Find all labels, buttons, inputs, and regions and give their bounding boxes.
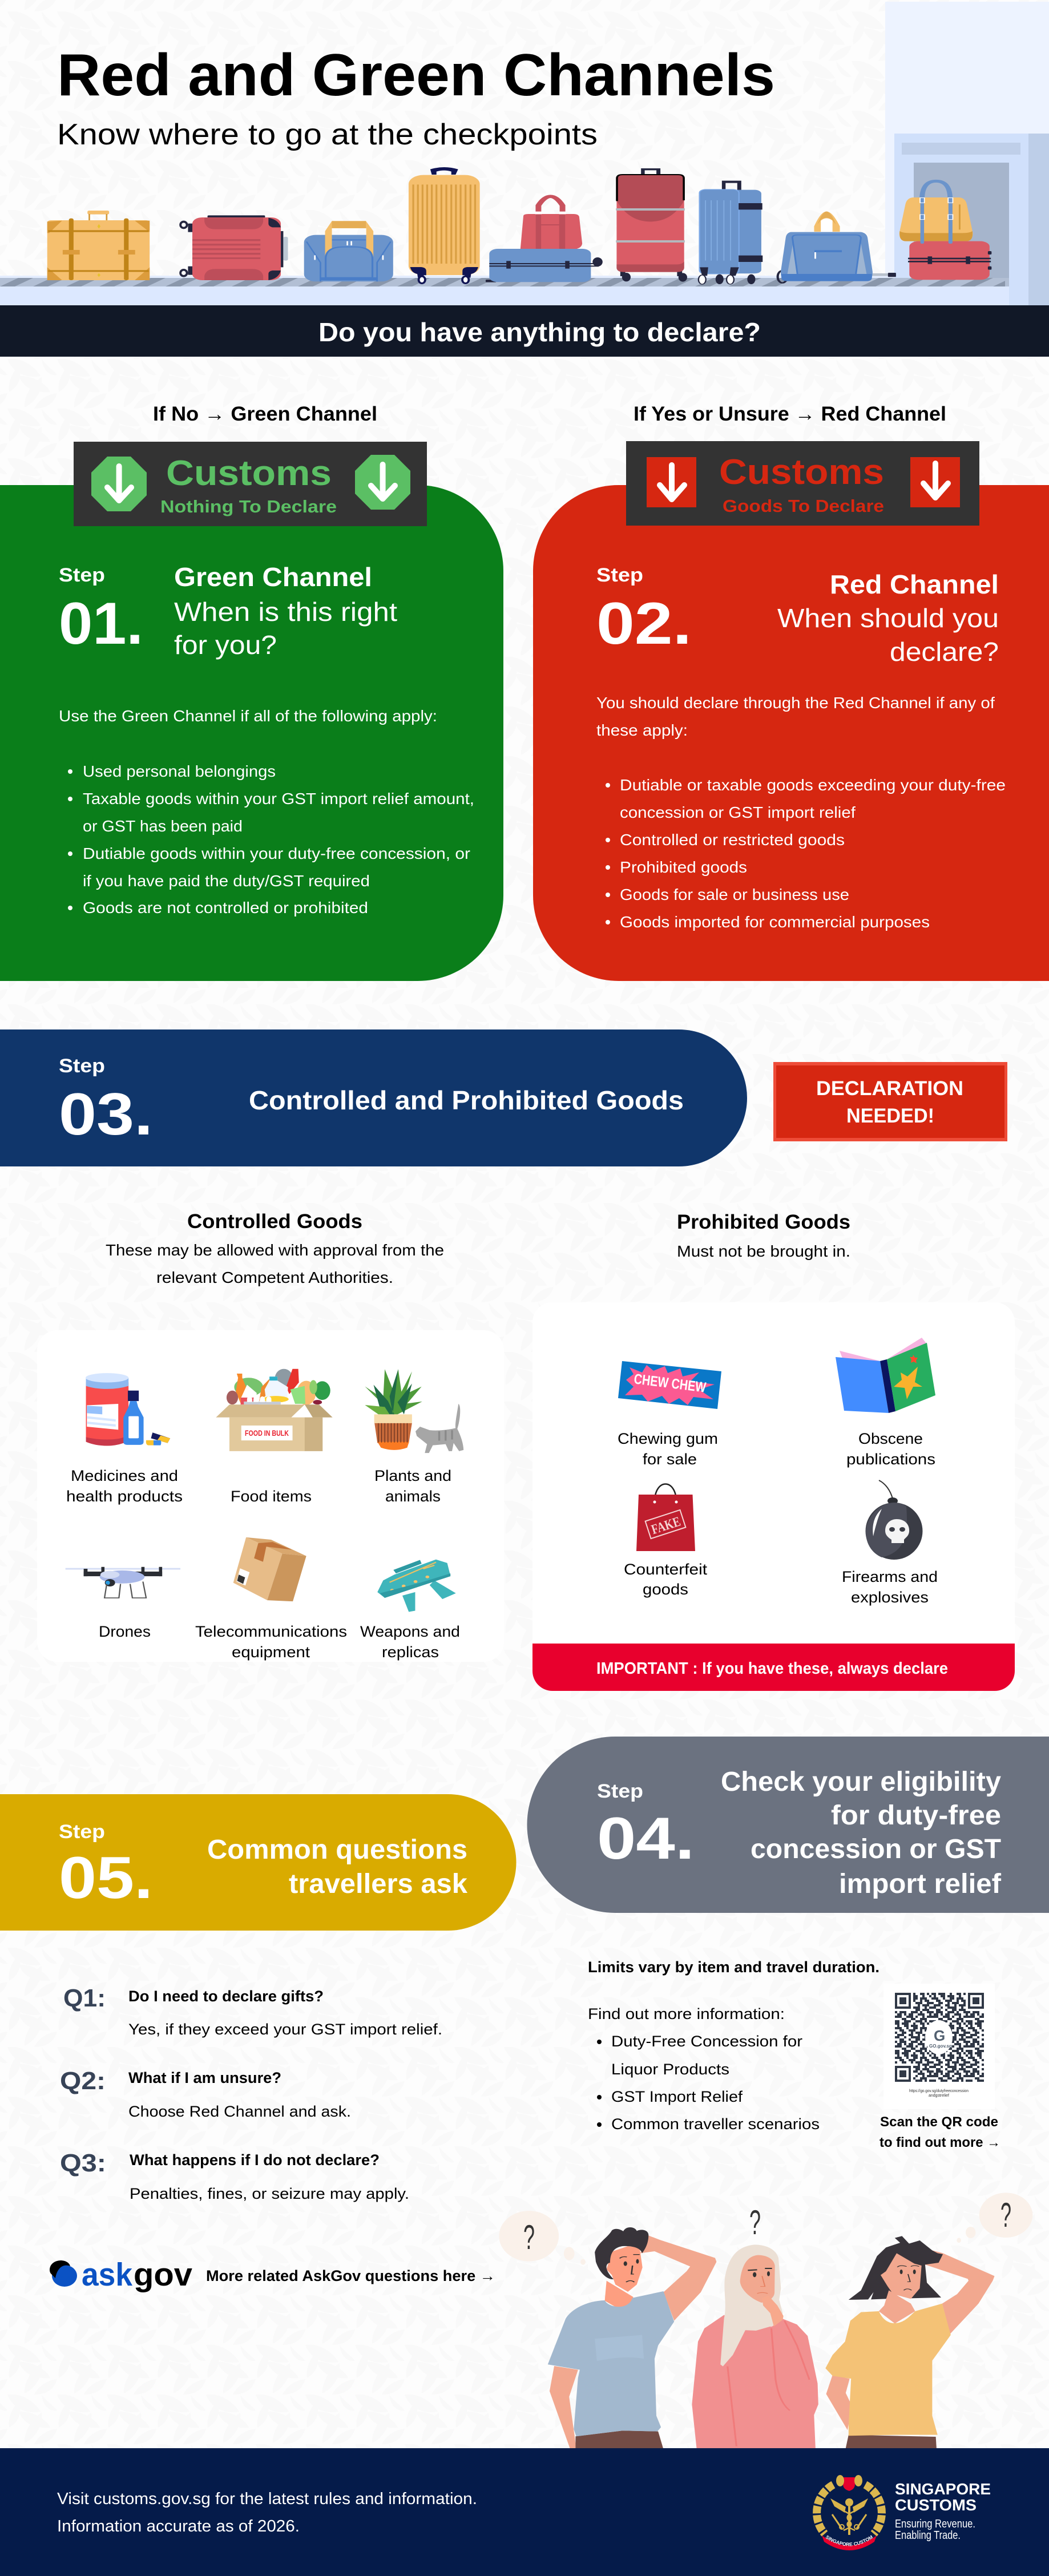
label: telecommunications equipment: equipment [232,1644,310,1661]
qr caption [879,2114,1000,2150]
woman in yellow shirt [825,2236,995,2448]
link text: more askgov questions: More related AskGov questions here → [206,2267,495,2284]
logo text [895,2480,991,2542]
panel: step 03 controlled and prohibited goods: Step [59,1055,105,1077]
bullet list: Goods imported for commercial purposes [620,913,930,931]
faq: question one: Yes, if they exceed your GST import relief. [128,2021,442,2038]
step number [59,564,143,657]
step number [596,564,692,657]
label: medicines [66,1467,183,1505]
label: medicines: Medicines and [71,1467,178,1484]
heading: controlled goods [106,1210,444,1286]
icon: plant and cat [365,1369,463,1453]
step number: Step [596,564,643,586]
qr code card: https://go.gov.sg/dutyfreeconcession [909,2089,969,2093]
panel: step 05 common questions: Step [59,1821,105,1843]
man in blue shirt [548,2227,716,2448]
bullet list: Prohibited goods [620,858,747,876]
heading: if yes or unsure red channel: If Yes or Unsure → Red Channel [634,403,946,425]
sign text [160,454,337,516]
footer note: Visit customs.gov.sg for the latest rules and information. [57,2490,477,2508]
bullet list: Taxable goods within your GST import relief amount, [83,790,474,807]
woman in hijab [692,2244,818,2448]
icon: medicines [86,1373,170,1446]
sign text: Goods To Declare [723,496,884,516]
bullet list: or GST has been paid [83,817,243,835]
panel heading: When is this right [174,597,397,627]
panel heading: Red Channel [830,570,999,599]
faq: question two: What if I am unsure? [128,2069,281,2086]
panel heading: for you? [174,630,277,660]
heading: if no green channel: If No → Green Channel [153,403,377,425]
bullet list [606,776,1006,931]
icon: drone [66,1567,180,1598]
step number: Step [59,564,105,586]
intro text: these apply: [596,721,688,739]
panel heading [174,562,397,660]
icon: food box: FOOD IN BULK [245,1428,289,1438]
panel: step 03 controlled and prohibited goods: 03. [59,1081,153,1148]
icon: chewing gum: CHEW CHEW [633,1371,707,1396]
intro text [596,694,995,739]
icon: parcel [233,1537,306,1601]
label: chewing gum for sale [618,1430,718,1468]
illustration: checkpoint wall and doorway [885,2,1049,305]
thought bubbles [499,2193,1032,2265]
panel: step 05 common questions: travellers ask [289,1869,467,1899]
faq: question three [60,2149,409,2202]
intro text: You should declare through the Red Channel if any of [596,694,995,712]
question marks: ? [1000,2196,1011,2234]
label: plants and animals: animals [385,1488,441,1505]
icon: red down arrow left [647,457,696,507]
panel: step 04 check eligibility: Check your eligibility [721,1767,1001,1797]
panel: step 04 check eligibility: Step [597,1780,643,1802]
logo text: SINGAPORE [895,2480,991,2498]
illustration: conveyor belt [0,276,1009,305]
qr code card: andgstrelief [929,2094,949,2098]
text block: limits and further information: Liquor Products [611,2061,729,2078]
banner: do you have anything to declare: Do you have anything to declare? [318,317,761,347]
label: weapons and replicas: replicas [382,1644,439,1661]
intro text: Use the Green Channel if all of the following apply: [59,707,437,725]
faq: question two: Q2: [60,2067,106,2095]
panel: step 03 controlled and prohibited goods: Controlled and Prohibited Goods [249,1085,684,1115]
label: plants and animals: Plants and [374,1467,451,1484]
label: telecommunications equipment [195,1623,347,1661]
sign: customs goods to declare [626,441,979,526]
icon: obscene publication [836,1338,935,1413]
label: chewing gum for sale: Chewing gum [618,1430,718,1447]
faq: question one [63,1984,442,2038]
panel: step 01 green channel [0,485,503,981]
faq: question three: Penalties, fines, or seizure may apply. [130,2185,409,2202]
sign: customs nothing to declare [74,442,427,526]
subtitle: Know where to go at the checkpoints [57,118,598,151]
bullet list: Dutiable or taxable goods exceeding your duty-free [620,776,1006,794]
bullet list: Goods are not controlled or prohibited [83,899,368,916]
label: counterfeit goods: goods [643,1581,688,1598]
heading: controlled goods: relevant Competent Authorities. [156,1269,393,1286]
label: medicines: health products [66,1488,183,1505]
step number: 01. [59,591,143,657]
question marks [523,2196,1011,2256]
bullet list: concession or GST import relief [620,804,856,821]
faq: question one: Do I need to declare gifts? [128,1988,324,2005]
callout: important always declare [532,1644,1015,1691]
label: counterfeit goods [624,1561,708,1598]
callout: declaration needed: NEEDED! [846,1105,934,1127]
panel: prohibited goods card [532,1302,1015,1691]
qr code card: GO.gov.sg [929,2044,952,2049]
label: firearms and explosives: Firearms and [842,1568,938,1585]
logo text: Ensuring Revenue. [895,2518,975,2530]
icon: counterfeit bag [636,1484,695,1551]
question marks: ? [523,2218,535,2256]
label: chewing gum for sale: for sale [643,1451,697,1468]
faq: question one: Q1: [63,1984,106,2012]
qr code card [883,1984,995,2109]
icon: green down arrow left [91,457,147,511]
panel heading [777,570,999,667]
text block: limits and further information: Limits vary by item and travel duration. [588,1959,879,1976]
panel: step 05 common questions: Common questions [207,1835,467,1865]
faq: question three: What happens if I do not declare? [130,2151,380,2169]
logo: singapore customs crest: SINGAPORE CUSTOMS [825,2535,873,2546]
icon: red down arrow right [910,457,960,507]
label: telecommunications equipment: Telecommunications [195,1623,347,1640]
logo text: Enabling Trade. [895,2529,961,2542]
label: firearms and explosives: explosives [851,1589,929,1606]
panel heading: When should you [777,603,999,633]
header: title and baggage hall [0,2,1049,305]
panel heading: Green Channel [174,562,372,592]
icon: replica weapon [377,1560,456,1612]
text block: limits and further information [588,1959,879,2133]
qr code card: G [934,2027,945,2044]
heading: prohibited goods: Prohibited Goods [677,1211,850,1233]
label: obscene publications [846,1430,935,1468]
faq: question two: Choose Red Channel and ask. [128,2103,351,2120]
footer note: Information accurate as of 2026. [57,2517,300,2535]
logo text: CUSTOMS [895,2496,977,2514]
icon: chewing gum [618,1361,721,1409]
label: obscene publications: Obscene [858,1430,923,1447]
icon: food box [216,1369,333,1451]
faq: question two [60,2067,351,2120]
text block: limits and further information: Find out more information: [588,2005,785,2022]
banner: do you have anything to declare [0,305,1049,357]
label: drones: Drones [99,1623,151,1640]
question marks: ? [749,2203,761,2242]
icon: green down arrow right [355,455,410,510]
logo: askgov: gov [134,2256,192,2293]
panel heading: declare? [890,637,999,667]
heading: prohibited goods: Must not be brought in. [677,1242,850,1260]
text block: limits and further information: Duty-Free Concession for [611,2033,802,2050]
panel: step 04 check eligibility: import relief [839,1869,1002,1899]
callout: declaration needed [773,1062,1007,1141]
label: weapons and replicas: Weapons and [360,1623,460,1640]
label: obscene publications: publications [846,1451,935,1468]
logo: askgov [50,2256,192,2293]
panel: step 04 check eligibility: for duty-free [831,1800,1001,1831]
panel: step 05 common questions: 05. [59,1845,153,1911]
sign text: Nothing To Declare [160,496,337,516]
panel: step 05 common questions [0,1794,516,1931]
label: food items: Food items [231,1488,312,1505]
label: counterfeit goods: Counterfeit [624,1561,708,1578]
callout: important always declare: IMPORTANT : If you have these, always declare [596,1660,948,1678]
bullet list: Goods for sale or business use [620,886,849,903]
text block: limits and further information: GST Import Relief [611,2088,743,2105]
bullet list: Used personal belongings [83,762,276,780]
bullet list: Controlled or restricted goods [620,831,845,849]
panel: step 04 check eligibility: concession or GST [751,1834,1001,1864]
qr caption: to find out more → [879,2135,1000,2150]
illustration: luggage right group [489,168,991,284]
panel: controlled goods card [37,1330,504,1662]
panel: step 03 controlled and prohibited goods [0,1029,747,1166]
panel: step 04 check eligibility [527,1737,1049,1913]
bullet list: if you have paid the duty/GST required [83,872,370,890]
title: Red and Green Channels [57,42,775,108]
sign text [719,453,884,516]
heading: prohibited goods [677,1211,850,1260]
panel: step 04 check eligibility: 04. [597,1806,695,1872]
step number: 02. [596,591,692,657]
callout: declaration needed: DECLARATION [816,1077,963,1100]
label: firearms and explosives [842,1568,938,1606]
faq: question three: Q3: [60,2149,106,2177]
logo: askgov: ask [82,2256,132,2293]
icon: bomb [865,1480,922,1560]
bullet list: Dutiable goods within your duty-free concession, or [83,845,470,862]
heading: controlled goods: These may be allowed with approval from the [106,1241,444,1259]
heading: controlled goods: Controlled Goods [187,1210,362,1233]
sign text: Customs [166,454,332,493]
sign text: Customs [719,453,884,492]
footer note [57,2490,477,2535]
panel: step 02 red channel [533,485,1049,981]
illustration: luggage left group [47,167,497,284]
label: plants and animals [374,1467,451,1505]
qr caption: Scan the QR code [880,2114,998,2130]
illustration: confused travellers [499,2193,1032,2448]
label: weapons and replicas [360,1623,460,1661]
bullet list [68,762,474,916]
text block: limits and further information: Common traveller scenarios [611,2115,820,2133]
icon: counterfeit bag: FAKE [649,1514,683,1537]
